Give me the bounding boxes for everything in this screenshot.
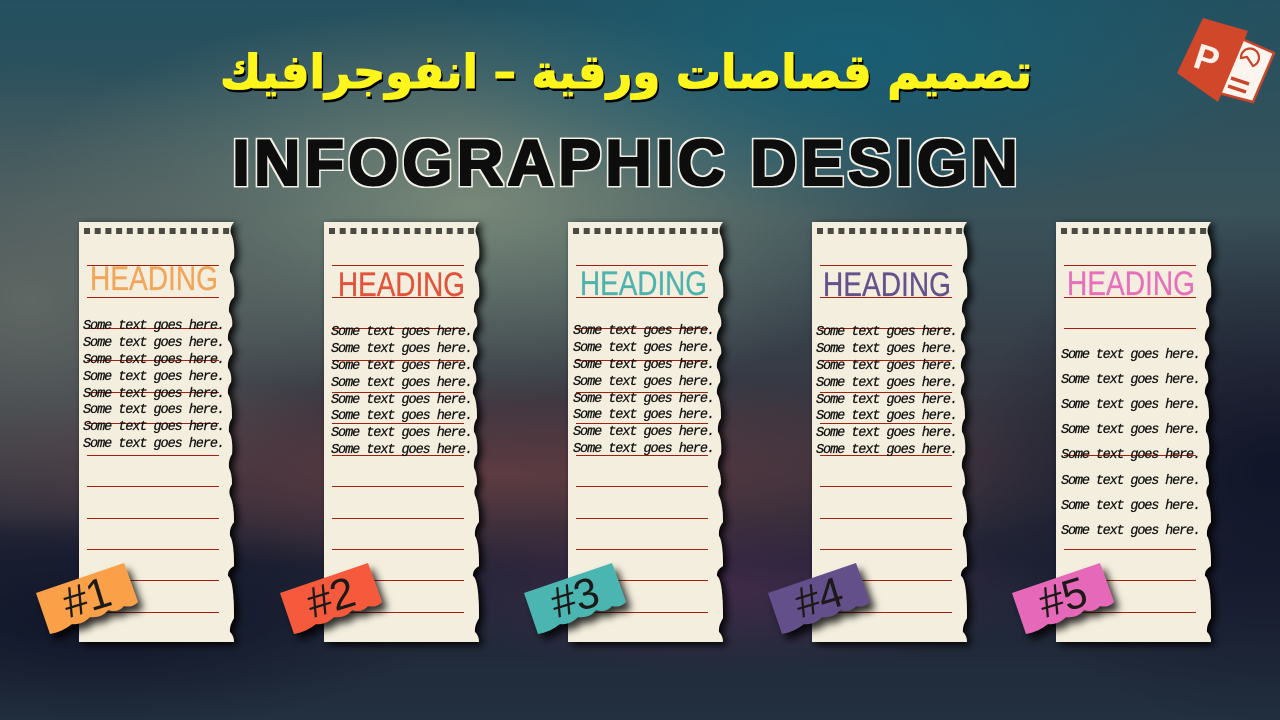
- text lines 2: Some text goes here.: [331, 325, 473, 340]
- text lines 4: Some text goes here.: [816, 409, 958, 424]
- text lines 3: Some text goes here.: [573, 341, 715, 356]
- text lines 3: Some text goes here.: [573, 442, 715, 457]
- text lines 3: Some text goes here.: [573, 358, 715, 373]
- tag: #3: [524, 563, 626, 634]
- tag: #5: [1012, 563, 1114, 634]
- text lines 1: Some text goes here.: [83, 403, 225, 418]
- heading 5: HEADING: [1067, 265, 1195, 303]
- text lines 5: Some text goes here.: [1061, 423, 1201, 438]
- text lines 4: Some text goes here.: [816, 393, 958, 408]
- tag: #3: #3: [545, 568, 605, 628]
- text lines 4: Some text goes here.: [816, 359, 958, 374]
- panel: note 5: [1056, 222, 1211, 642]
- text lines 5: Some text goes here.: [1061, 448, 1201, 463]
- text lines 4: Some text goes here.: [816, 342, 958, 357]
- tag: #1: #1: [57, 568, 117, 628]
- text lines 2: Some text goes here.: [331, 409, 473, 424]
- text lines 3: Some text goes here.: [573, 408, 715, 423]
- text lines 1: Some text goes here.: [83, 370, 225, 385]
- text lines 4: Some text goes here.: [816, 376, 958, 391]
- text lines 2: Some text goes here.: [331, 393, 473, 408]
- text lines 1: Some text goes here.: [83, 336, 225, 351]
- text lines 1: Some text goes here.: [83, 353, 225, 368]
- text lines 3: Some text goes here.: [573, 324, 715, 339]
- text lines 1: Some text goes here.: [83, 319, 225, 334]
- text lines 3: Some text goes here.: [573, 392, 715, 407]
- text lines 5: [1061, 348, 1201, 539]
- text lines 1: Some text goes here.: [83, 437, 225, 452]
- text lines 3: Some text goes here.: [573, 425, 715, 440]
- text lines 4: Some text goes here.: [816, 325, 958, 340]
- heading 4: HEADING: [823, 266, 951, 304]
- text lines 5: Some text goes here.: [1061, 348, 1201, 363]
- text lines 3: Some text goes here.: [573, 375, 715, 390]
- heading 3: HEADING: [580, 265, 707, 303]
- text lines 1: Some text goes here.: [83, 420, 225, 435]
- panel: note 1: [79, 222, 234, 642]
- text lines 2: Some text goes here.: [331, 426, 473, 441]
- text lines 1: [83, 319, 225, 452]
- panel: note 2: [324, 222, 479, 642]
- icon: powerpoint logo: [1177, 18, 1274, 102]
- text lines 5: Some text goes here.: [1061, 499, 1201, 514]
- title: arabic: تصميم قصاصات ورقية – انفوجرافيك: [220, 45, 1032, 100]
- text lines 4: Some text goes here.: [816, 426, 958, 441]
- tag: #5: #5: [1033, 568, 1093, 628]
- title: english: INFOGRAPHIC DESIGN: [232, 126, 1018, 199]
- text lines 2: Some text goes here.: [331, 443, 473, 458]
- heading 1: HEADING: [90, 260, 218, 298]
- text lines 3: [573, 324, 715, 457]
- text lines 5: Some text goes here.: [1061, 373, 1201, 388]
- panel: note 3: [568, 222, 723, 642]
- text lines 5: Some text goes here.: [1061, 398, 1201, 413]
- text lines 1: Some text goes here.: [83, 387, 225, 402]
- text lines 4: [816, 325, 958, 458]
- icon: powerpoint logo: P: [1189, 35, 1225, 82]
- tag: #1: [36, 563, 138, 634]
- tag: #4: [768, 563, 870, 634]
- text lines 5: Some text goes here.: [1061, 524, 1201, 539]
- text lines 2: Some text goes here.: [331, 376, 473, 391]
- text lines 4: Some text goes here.: [816, 443, 958, 458]
- tag: #2: [280, 563, 382, 634]
- text lines 2: Some text goes here.: [331, 359, 473, 374]
- text lines 2: [331, 325, 473, 458]
- text lines 2: Some text goes here.: [331, 342, 473, 357]
- tag: #4: #4: [789, 568, 849, 628]
- tag: #2: #2: [301, 568, 361, 628]
- text lines 5: Some text goes here.: [1061, 474, 1201, 489]
- panel: note 4: [812, 222, 967, 642]
- heading 2: HEADING: [338, 266, 465, 304]
